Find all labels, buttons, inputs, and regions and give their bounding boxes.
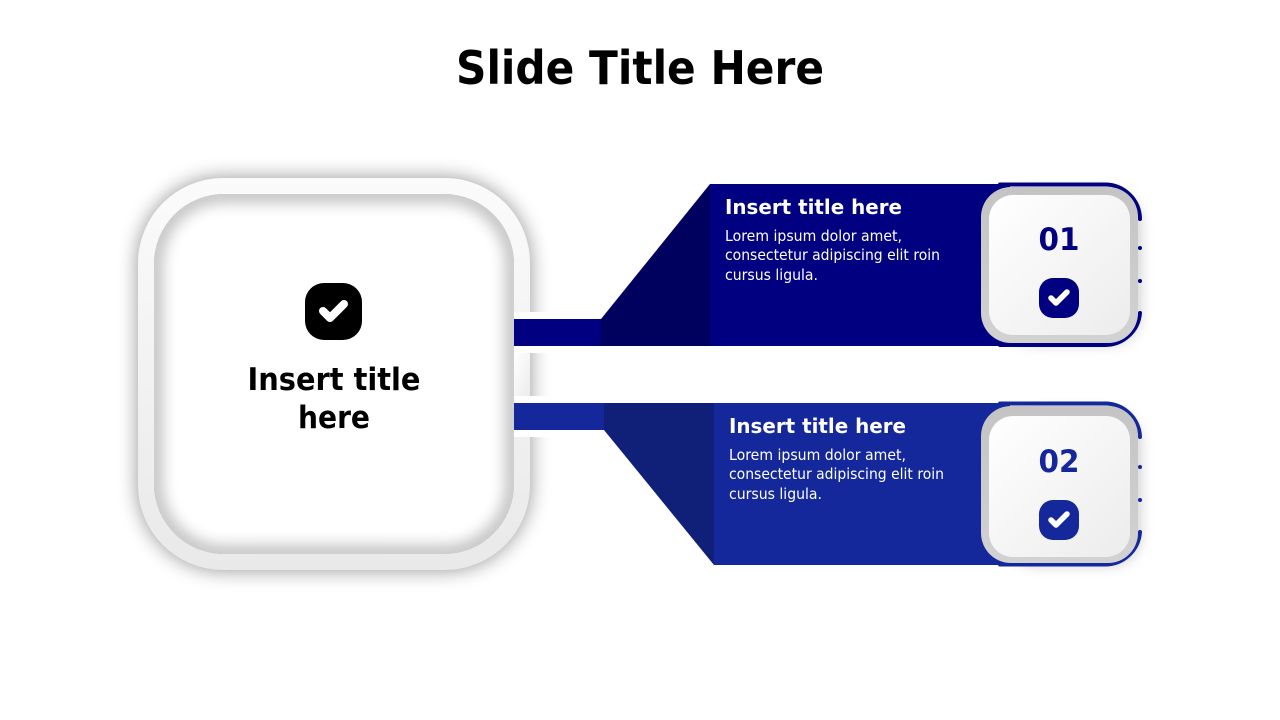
item 02 body text: consectetur adipiscing elit roin (729, 465, 944, 483)
item 01 title: Insert title here (725, 195, 902, 219)
panel: central rounded ring (138, 178, 530, 570)
icon: central check badge (305, 283, 362, 340)
item 02 body text: Lorem ipsum dolor amet, (729, 446, 906, 464)
item 02 body text: cursus ligula. (729, 485, 822, 503)
item 01 body text: cursus ligula. (725, 266, 818, 284)
panel: item 02 (514, 403, 1142, 565)
item 01 body text: consectetur adipiscing elit roin (725, 246, 940, 264)
heading: central title: here (298, 400, 370, 436)
item 01 body text: Lorem ipsum dolor amet, (725, 227, 902, 245)
blue band 01 (710, 184, 1010, 346)
dark fold 01 (601, 184, 710, 346)
heading: central title: Insert title (248, 362, 420, 398)
title: Slide Title Here (456, 41, 824, 95)
connector bar 02 (514, 403, 604, 430)
blue band 02 (714, 403, 1010, 565)
outline arcs 01 (1000, 184, 1142, 345)
number card 02 (981, 406, 1138, 563)
number card 01 (981, 187, 1138, 343)
number card 01: 01 (1038, 222, 1080, 258)
heading: central title (248, 362, 420, 436)
outline arcs 02 (1000, 404, 1142, 565)
item 01 body text (725, 227, 940, 284)
item 02 title: Insert title here (729, 414, 906, 438)
panel: item 01 (514, 184, 1142, 346)
connector bar 01 (514, 319, 601, 346)
dark fold 02 (604, 403, 714, 565)
item 02 body text (729, 446, 944, 503)
number card 02: 02 (1038, 444, 1080, 480)
